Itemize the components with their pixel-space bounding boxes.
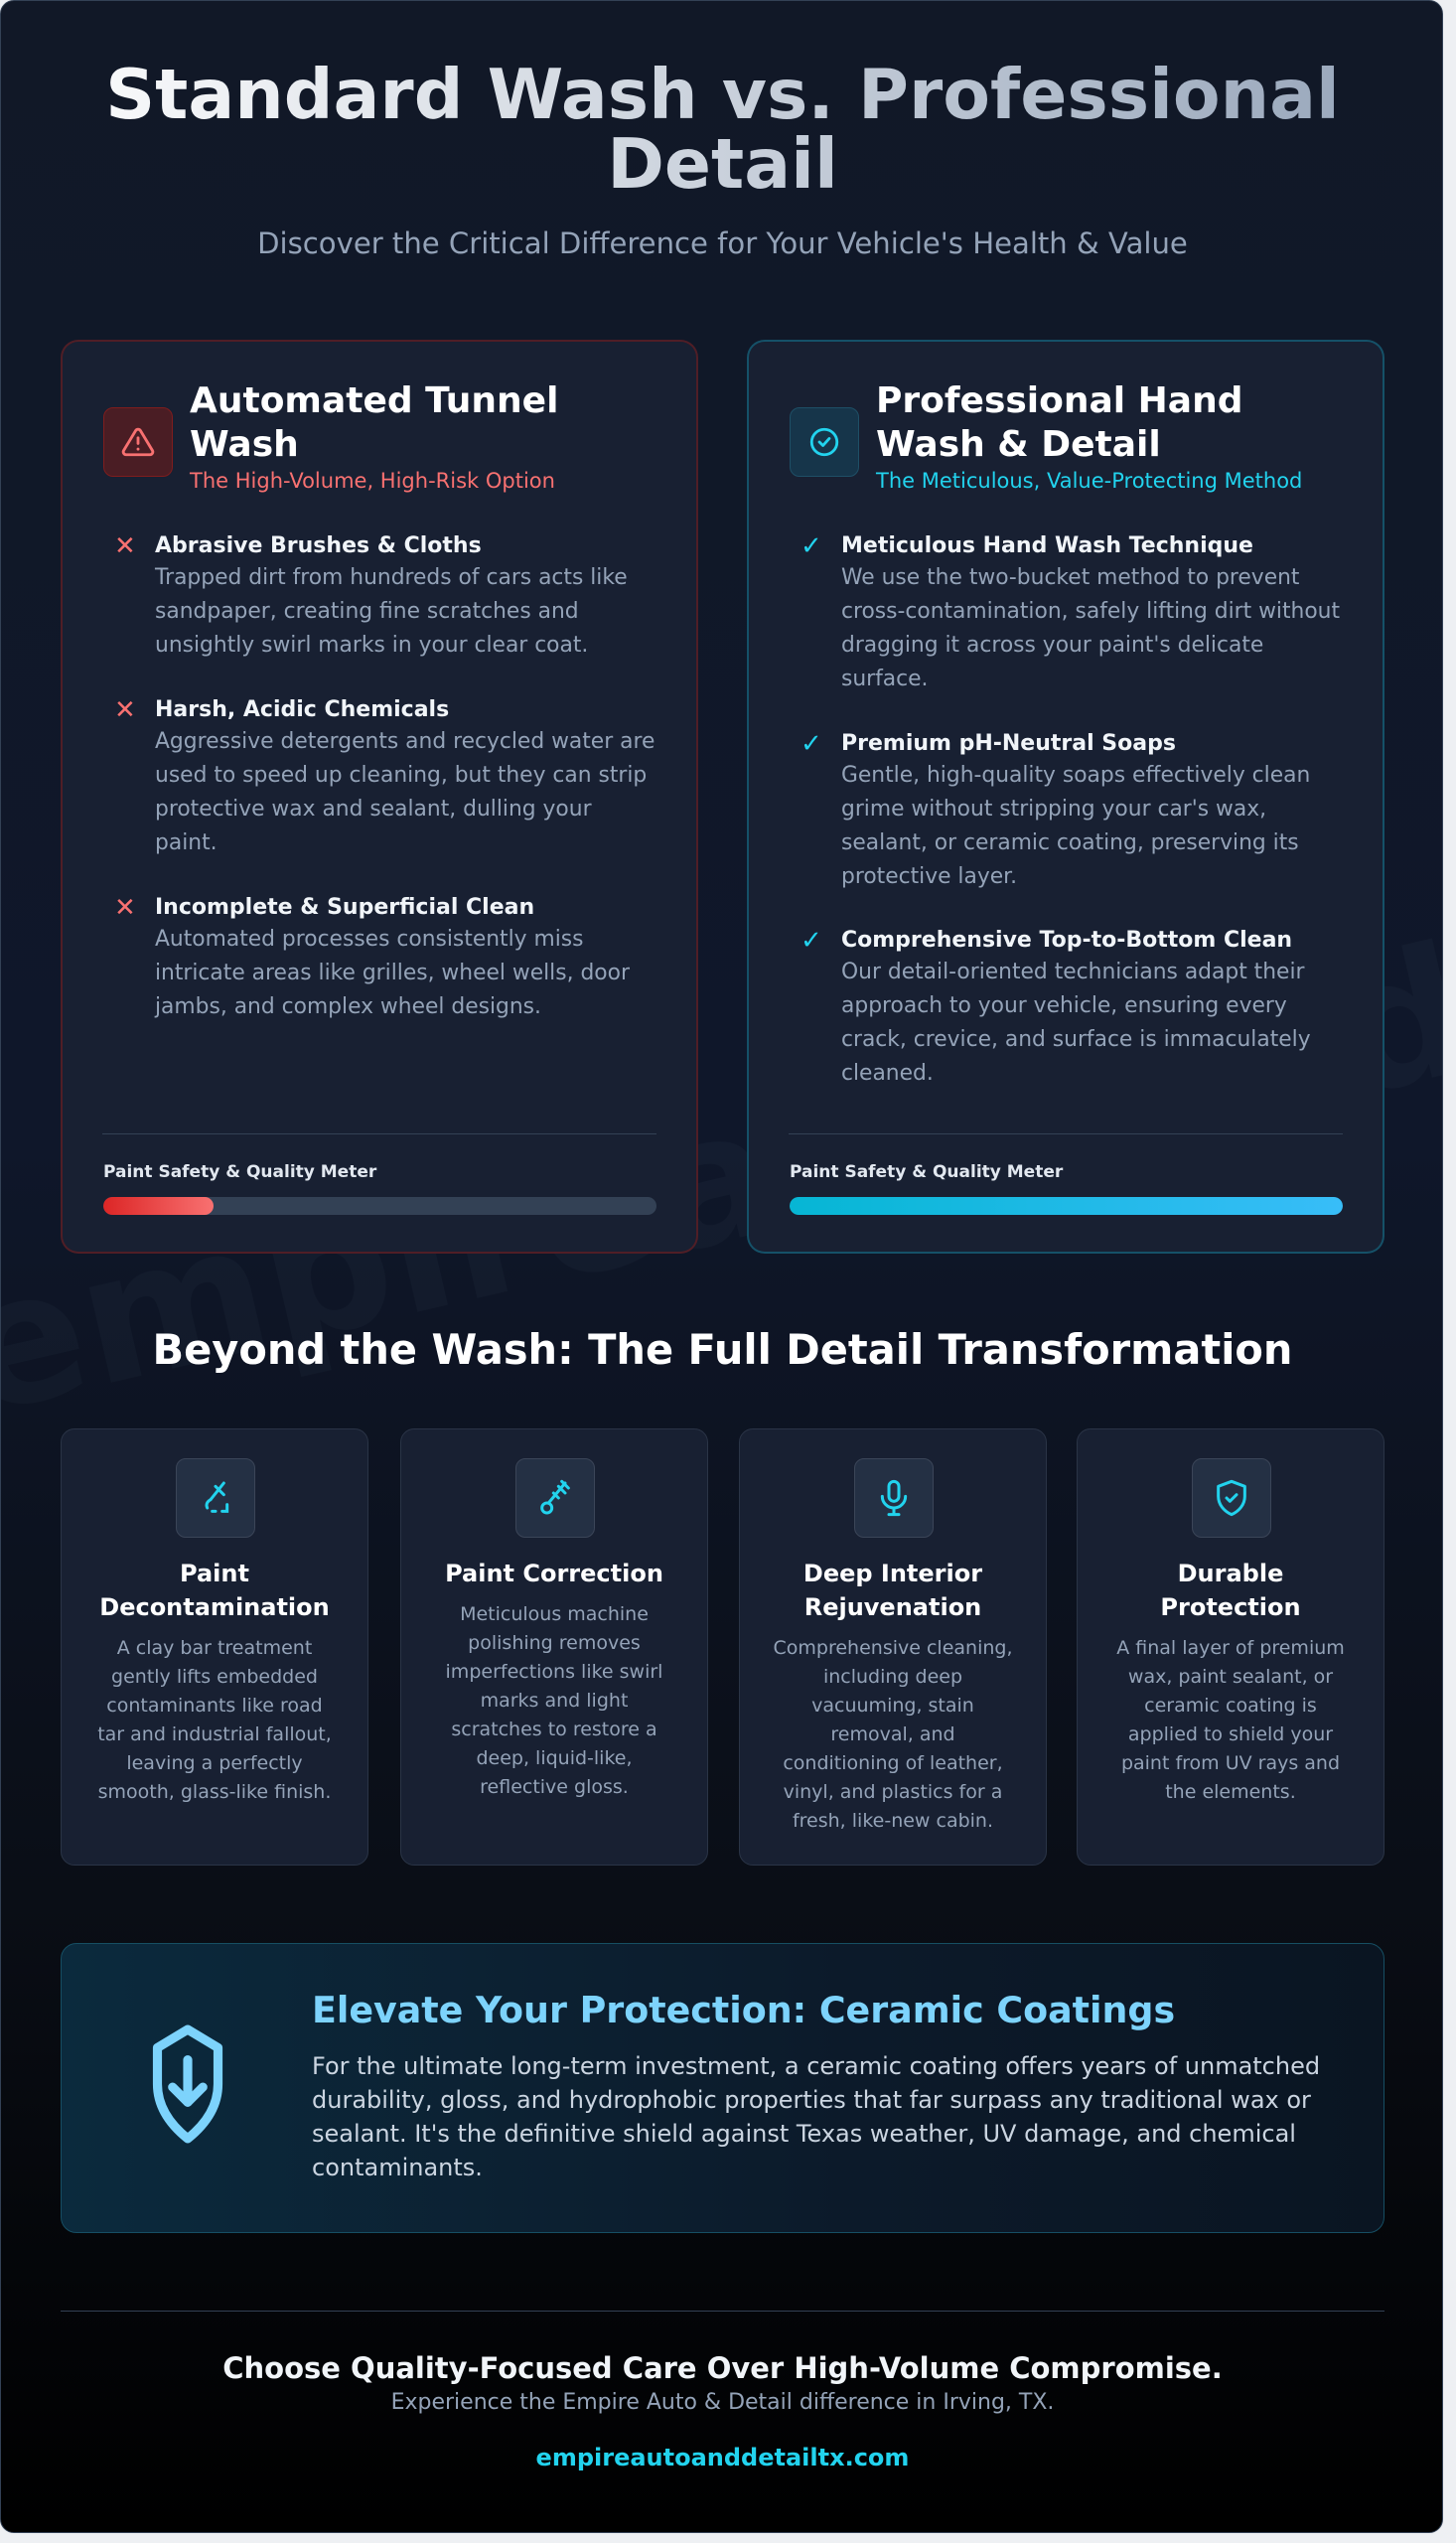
footer subtext: Experience the Empire Auto & Detail difference in Irving, TX. (391, 2390, 1054, 2415)
item: abrasive brushes: Trapped dirt from hundreds of cars acts like sandpaper, creating fine scratches and unsightly swirl marks in your clear coat. (155, 565, 628, 658)
card title: Wash (190, 424, 299, 465)
feature: paint correction: Paint Correction (445, 1560, 663, 1587)
item: incomplete clean: Incomplete & Superficial Clean (155, 895, 534, 920)
feature: deep interior: Deep Interior (803, 1560, 982, 1587)
item: incomplete clean (114, 893, 630, 1019)
feature: deep interior (739, 1428, 1047, 1866)
item: harsh chemicals: Aggressive detergents and recycled water are used to speed up cleaning, but they can strip protective wax and sealant, dulling your paint. (155, 729, 655, 855)
item: comprehensive: Our detail-oriented technicians adapt their approach to your vehicle, ensuring every crack, crevice, and surface is immaculately cleaned. (841, 960, 1311, 1086)
icon: polisher (515, 1458, 595, 1538)
feature: durable protection: Durable (1178, 1560, 1283, 1587)
item: hand wash: We use the two-bucket method to prevent cross-contamination, safely lifting dirt without dragging it across your paint's delicate surface. (841, 565, 1340, 691)
panel: automated tunnel wash (61, 340, 698, 1254)
meter label: Paint Safety & Quality Meter (790, 1162, 1063, 1182)
icon: check circle (790, 407, 859, 477)
callout: ceramic coatings (61, 1943, 1384, 2233)
feature: deep interior: Comprehensive cleaning, including deep vacuuming, stain removal, and conditioning of leather, vinyl, and plastics for a fresh, like-new cabin. (773, 1637, 1013, 1832)
icon: warning (103, 407, 173, 477)
icon: shield download (153, 2024, 222, 2144)
feature: paint decontamination: Paint (180, 1560, 249, 1587)
title: Standard Wash vs. Professional (105, 55, 1340, 135)
card subtitle: The Meticulous, Value-Protecting Method (876, 469, 1302, 493)
item: harsh chemicals: Harsh, Acidic Chemicals (155, 697, 449, 722)
meter bar: full (790, 1197, 1343, 1215)
item: abrasive brushes: ✕ (114, 531, 136, 561)
feature: durable protection (1077, 1428, 1384, 1866)
feature: paint decontamination (61, 1428, 368, 1866)
callout title: Elevate Your Protection: Ceramic Coatings (312, 1989, 1175, 2031)
item: hand wash: ✓ (801, 531, 822, 561)
card title: Wash & Detail (876, 424, 1161, 465)
callout text: For the ultimate long-term investment, a ceramic coating offers years of unmatched durability, gloss, and hydrophobic properties that far surpass any traditional wax or sealant. It's the definitive shield against Texas weather, UV damage, and chemical contaminants. (312, 2052, 1320, 2181)
card title: Automated Tunnel (190, 380, 558, 421)
feature: deep interior: Rejuvenation (804, 1593, 981, 1621)
section heading: Beyond the Wash: The Full Detail Transformation (153, 1325, 1292, 1374)
feature: paint decontamination: A clay bar treatment gently lifts embedded contaminants like road tar and industrial fallout, leaving a perfectly smooth, glass-like finish. (97, 1637, 332, 1803)
item: soaps: ✓ (801, 729, 822, 759)
title: Detail (607, 124, 838, 205)
feature: paint correction (400, 1428, 708, 1866)
meter bar: low (103, 1197, 656, 1215)
item: incomplete clean: Automated processes consistently miss intricate areas like grilles, wheel wells, door jambs, and complex wheel designs. (155, 927, 630, 1019)
panel: professional hand wash (747, 340, 1384, 1254)
item: comprehensive: ✓ (801, 926, 822, 956)
footer link: empireautoanddetailtx.com (536, 2444, 909, 2471)
item: incomplete clean: ✕ (114, 893, 136, 923)
card title (876, 380, 1243, 465)
card title (190, 380, 558, 465)
item: soaps: Gentle, high-quality soaps effectively clean grime without stripping your car's wax, sealant, or ceramic coating, preserving its protective layer. (841, 763, 1310, 889)
feature: paint correction: Meticulous machine polishing removes imperfections like swirl marks and light scratches to restore a deep, liquid-like, reflective gloss. (446, 1603, 662, 1798)
card subtitle: The High-Volume, High-Risk Option (190, 469, 555, 493)
feature: durable protection: Protection (1160, 1593, 1301, 1621)
item: hand wash: Meticulous Hand Wash Technique (841, 533, 1253, 558)
meter label: Paint Safety & Quality Meter (103, 1162, 376, 1182)
item: soaps: Premium pH-Neutral Soaps (841, 731, 1176, 756)
feature: durable protection: A final layer of premium wax, paint sealant, or ceramic coating is applied to shield your paint from UV rays and the elements. (1116, 1637, 1345, 1803)
item: comprehensive: Comprehensive Top-to-Bottom Clean (841, 928, 1292, 953)
footer headline: Choose Quality-Focused Care Over High-Volume Compromise. (222, 2351, 1223, 2385)
item: harsh chemicals: ✕ (114, 695, 136, 725)
icon: microphone (854, 1458, 934, 1538)
icon: shield check (1192, 1458, 1271, 1538)
icon: clay (176, 1458, 255, 1538)
title (1, 61, 1444, 200)
feature: paint decontamination: Decontamination (99, 1593, 330, 1621)
card title: Professional Hand (876, 380, 1243, 421)
item: abrasive brushes: Abrasive Brushes & Cloths (155, 533, 482, 558)
item: abrasive brushes (114, 531, 628, 658)
subtitle: Discover the Critical Difference for Your Vehicle's Health & Value (257, 226, 1188, 260)
